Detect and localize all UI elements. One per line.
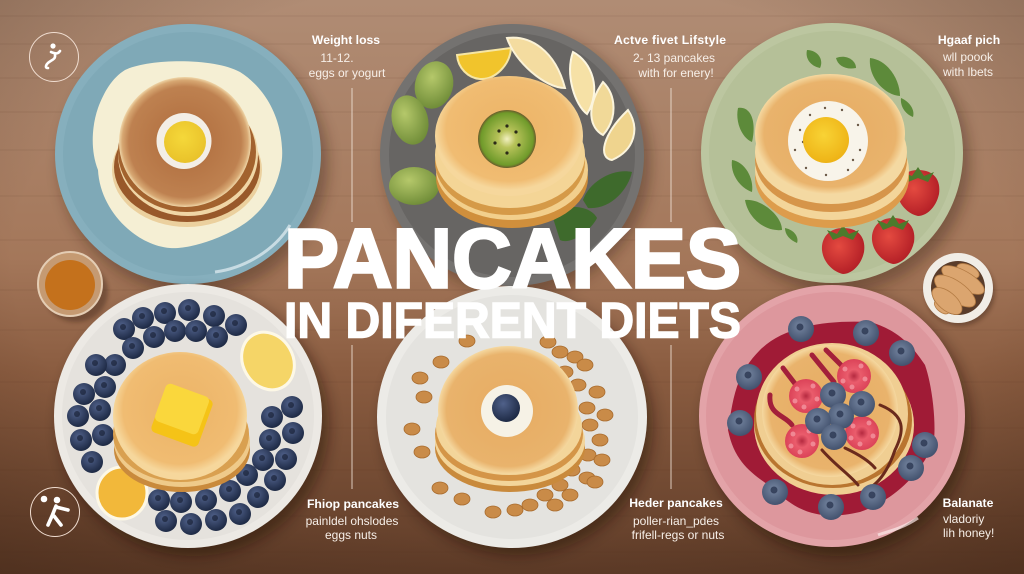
caption: high protein: with lbets bbox=[942, 65, 993, 79]
caption: bottom left pancakes: eggs nuts bbox=[325, 528, 377, 542]
fried egg bbox=[788, 101, 868, 181]
plate: balanced berries and syrup (pink) bbox=[699, 285, 971, 556]
caption: weight loss: eggs or yogurt bbox=[309, 66, 386, 80]
plate: active lifestyle (grey) bbox=[380, 24, 651, 295]
caption: balanced bbox=[943, 496, 994, 540]
blueberry on cream bbox=[481, 385, 533, 437]
caption: high protein: Hgaaf pich bbox=[938, 33, 1000, 47]
caption: weight loss: 11-12. bbox=[320, 51, 354, 65]
limes bbox=[386, 57, 459, 205]
caption: bottom middle pancakes: Heder pancakes bbox=[629, 496, 723, 510]
strawberries bbox=[822, 167, 939, 274]
honey jar bbox=[38, 252, 108, 322]
title: IN DIFERENT DIETS bbox=[284, 292, 741, 348]
plate: blueberries and butter (white) bbox=[54, 284, 329, 556]
caption: weight loss: Weight loss bbox=[312, 33, 380, 47]
plate: nuts (white) bbox=[377, 286, 653, 555]
pancake stack bbox=[112, 77, 262, 227]
blueberries bbox=[67, 299, 304, 535]
basil leaves bbox=[732, 50, 913, 243]
caption: bottom middle pancakes: frifell-regs or nuts bbox=[632, 528, 724, 542]
pancake stack bbox=[754, 343, 914, 495]
caption: bottom left pancakes bbox=[306, 497, 399, 542]
plate: high protein (green) bbox=[701, 23, 970, 292]
cream sauce bbox=[93, 61, 282, 248]
icon: stretching figure bbox=[30, 32, 78, 82]
caption: balanced: vladoriy bbox=[943, 512, 984, 526]
caption: high protein bbox=[938, 33, 1000, 79]
kiwi slice bbox=[473, 105, 541, 173]
title: PANCAKES bbox=[284, 212, 741, 306]
syrup drizzle bbox=[770, 350, 901, 490]
pancake stack bbox=[113, 352, 250, 492]
caption: active lifestyle: 2- 13 pancakes bbox=[633, 51, 715, 65]
title bbox=[284, 212, 741, 348]
scattered nuts bbox=[404, 335, 613, 518]
caption: active lifestyle: with for enery! bbox=[637, 66, 714, 80]
butter pat bbox=[150, 382, 214, 448]
egg topping bbox=[156, 113, 212, 169]
caption: active lifestyle bbox=[614, 33, 726, 80]
icon: ball player figure bbox=[30, 488, 80, 536]
bowl of almonds bbox=[923, 253, 995, 326]
leaves bbox=[552, 171, 632, 241]
caption: bottom left pancakes: painldel ohslodes bbox=[306, 514, 398, 528]
caption: bottom middle pancakes bbox=[629, 496, 724, 542]
caption: weight loss bbox=[309, 33, 386, 80]
caption: active lifestyle: Actve fivet Lifstyle bbox=[614, 33, 726, 47]
pancake stack bbox=[435, 76, 588, 228]
lemon wedges bbox=[457, 38, 634, 160]
caption: bottom middle pancakes: poller-rian_pdes bbox=[633, 514, 719, 528]
divider lines bbox=[352, 88, 671, 489]
raspberries and blueberries bbox=[727, 316, 938, 520]
lemon slices bbox=[97, 323, 305, 519]
pancake stack bbox=[755, 74, 909, 228]
plate: weight loss (blue) bbox=[55, 24, 328, 294]
pancake stack bbox=[435, 346, 585, 492]
berry sauce bbox=[728, 322, 935, 516]
caption: balanced: lih honey! bbox=[943, 526, 994, 540]
caption: high protein: wll poook bbox=[942, 50, 994, 64]
caption: balanced: Balanate bbox=[943, 496, 994, 510]
caption: bottom left pancakes: Fhiop pancakes bbox=[307, 497, 399, 511]
